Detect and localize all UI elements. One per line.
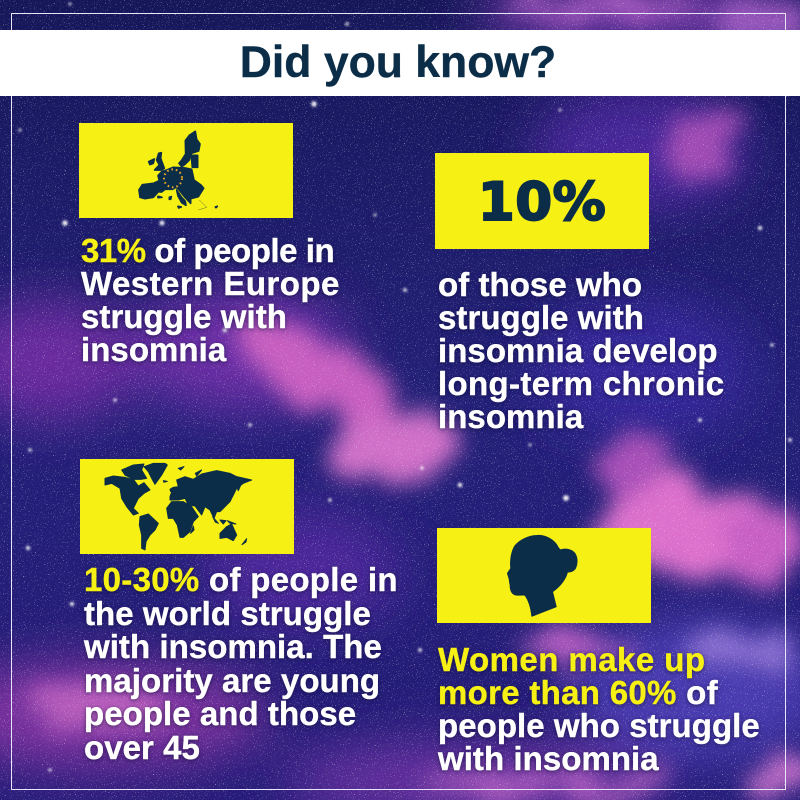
text: 10-30% of people in the world: people and those <box>84 695 356 732</box>
text: 10-30% of people in the world: the world struggle <box>84 595 371 632</box>
text: 10-30% of people in the world <box>82 561 398 766</box>
panel: world <box>80 459 398 766</box>
text: 10% develop chronic insomnia <box>437 266 725 435</box>
yellow box with head silhouette <box>437 528 651 623</box>
text: 10% develop chronic insomnia: struggle with <box>438 299 644 336</box>
panel: chronic insomnia <box>435 153 725 435</box>
text: 31% of people in Western Europe <box>80 232 340 368</box>
text: Women make up more than 60% <box>436 641 761 777</box>
text: 10-30% of people in the world: majority are young <box>84 662 380 699</box>
text: 10-30% of people in the world: with insomnia. The <box>84 628 382 665</box>
title banner <box>0 30 800 96</box>
yellow box with Europe map <box>79 123 293 218</box>
text: 10% develop chronic insomnia: of those who <box>438 266 642 303</box>
yellow box with world map <box>80 459 294 554</box>
heading: Did you know?: Did you know? <box>240 38 556 87</box>
text: 10% develop chronic insomnia: insomnia develop <box>438 332 718 369</box>
text: 31% of people in Western Europe: struggle with <box>81 298 287 335</box>
big number: 10%: 10% <box>478 172 606 233</box>
icon: world map <box>104 462 252 550</box>
panel: Western Europe <box>79 123 340 368</box>
icon: woman head silhouette <box>507 534 578 617</box>
text: 31% of people in Western Europe: 31% of people in <box>81 232 334 269</box>
text: Women make up more than 60%: more than 60% of <box>438 674 718 711</box>
text: Women make up more than 60%: Women make up <box>438 641 705 678</box>
yellow box with 10% <box>435 153 649 249</box>
panel: women <box>436 528 761 777</box>
text: 31% of people in Western Europe: insomnia <box>81 331 226 368</box>
text: 31% of people in Western Europe: Western Europe <box>81 265 340 302</box>
text: 10-30% of people in the world: 10-30% of people in <box>84 561 398 598</box>
text: Women make up more than 60%: with insomnia <box>438 740 659 777</box>
text: 10% develop chronic insomnia: long-term chronic <box>438 365 724 402</box>
text: Women make up more than 60%: people who struggle <box>438 707 760 744</box>
icon: Europe map <box>138 130 218 210</box>
text: 10% develop chronic insomnia: insomnia <box>438 398 583 435</box>
text: 10-30% of people in the world: over 45 <box>84 729 200 766</box>
